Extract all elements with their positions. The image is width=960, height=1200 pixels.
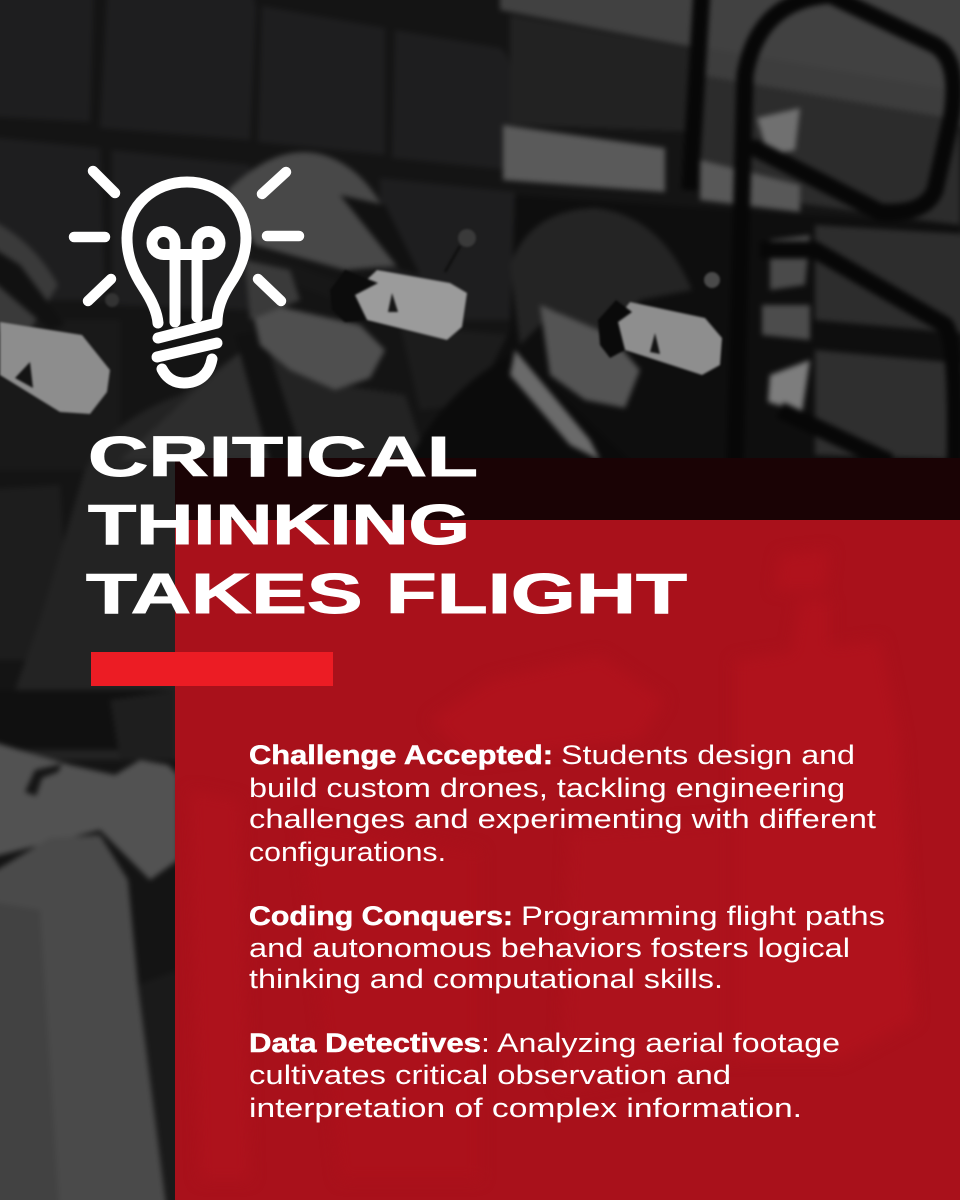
left student: [0, 215, 178, 1200]
text block: challenge accepted: Students design and: [561, 740, 855, 770]
text block: challenge accepted: configurations.: [249, 837, 446, 867]
text block: challenge accepted: [249, 740, 877, 867]
text block: data detectives: interpretation of complex information.: [249, 1093, 802, 1123]
goggles: [0, 229, 722, 414]
right student: [405, 208, 692, 470]
bleacher upper right: [440, 0, 960, 470]
text block: challenge accepted: Challenge Accepted:: [249, 740, 553, 770]
panel: red text background: [175, 520, 960, 1200]
text block: data detectives: [249, 1028, 840, 1123]
center student: [0, 152, 430, 760]
text block: challenge accepted: build custom drones, tackling engineering: [249, 773, 845, 803]
text block: challenge accepted: challenges and experimenting with different: [249, 804, 877, 834]
title: [86, 425, 687, 626]
title: TAKES FLIGHT: [86, 562, 687, 626]
title: THINKING: [88, 493, 470, 557]
accent bar: [91, 652, 333, 686]
text block: coding conquers: Coding Conquers:: [249, 901, 513, 931]
text block: coding conquers: and autonomous behaviors fosters logical: [249, 933, 850, 963]
text block: coding conquers: thinking and computational skills.: [249, 964, 723, 994]
icon: rays: [74, 171, 299, 301]
text block: data detectives: : Analyzing aerial footage: [481, 1028, 840, 1058]
title: CRITICAL: [88, 425, 478, 489]
text block: coding conquers: Programming flight paths: [521, 901, 885, 931]
railings: [690, 0, 956, 470]
panel: dark red strip: [175, 458, 960, 521]
icon: light bulb: [74, 171, 299, 383]
text block: data detectives: cultivates critical observation and: [249, 1060, 731, 1090]
icon: bulb outline: [127, 182, 246, 383]
bleacher seats left: [0, 0, 515, 660]
subtle photo shapes in red panel: [190, 550, 915, 1180]
text block: data detectives: Data Detectives: [249, 1028, 481, 1058]
text block: coding conquers: [249, 901, 885, 994]
